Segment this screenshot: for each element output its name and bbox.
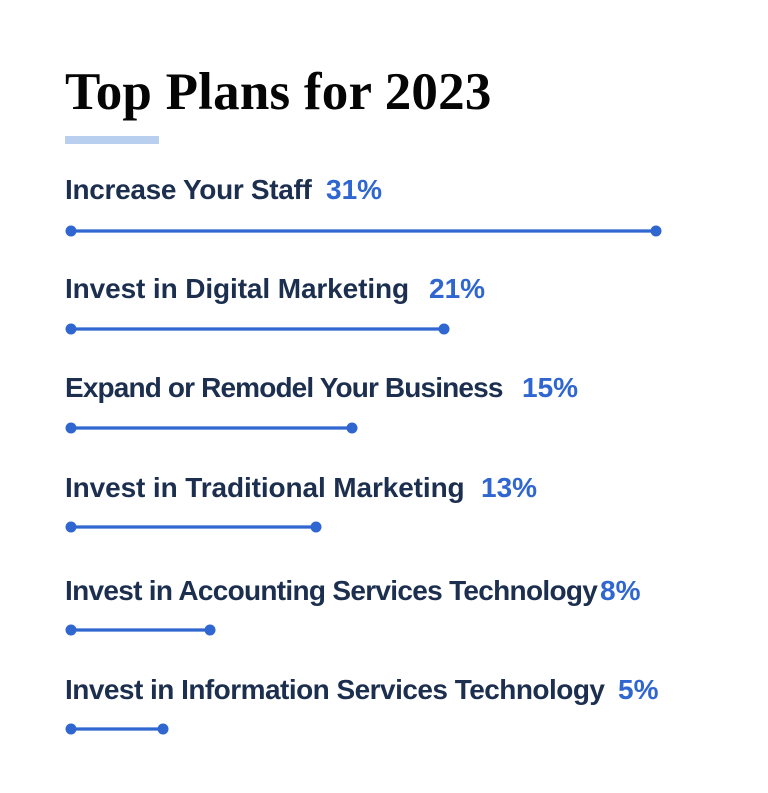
value: 31%: 31% <box>326 174 382 205</box>
bar: traditional marketing <box>66 522 322 532</box>
label: invest in accounting services technology: Invest in Accounting Services Technology <box>65 575 597 606</box>
label: invest in digital marketing: Invest in Digital Marketing <box>65 273 409 304</box>
bar: digital marketing <box>66 324 450 334</box>
value: 15%: 15% <box>522 372 578 403</box>
bar: accounting services technology <box>66 624 216 636</box>
label: increase your staff: Increase Your Staff <box>65 174 312 205</box>
label: invest in traditional marketing: Invest in Traditional Marketing <box>65 472 465 503</box>
bar: information services technology <box>66 724 168 734</box>
title: Top Plans for 2023 <box>65 63 492 121</box>
label: invest in information services technology: Invest in Information Services Technology <box>65 674 604 705</box>
bar: expand or remodel <box>66 422 358 434</box>
value: 5%: 5% <box>618 674 658 705</box>
label: expand or remodel your business: Expand or Remodel Your Business <box>65 372 503 403</box>
value: 21%: 21% <box>429 273 485 304</box>
value: 8%: 8% <box>600 575 640 606</box>
value: 13%: 13% <box>481 472 537 503</box>
bar: increase your staff <box>66 226 662 236</box>
title underline <box>65 136 159 144</box>
